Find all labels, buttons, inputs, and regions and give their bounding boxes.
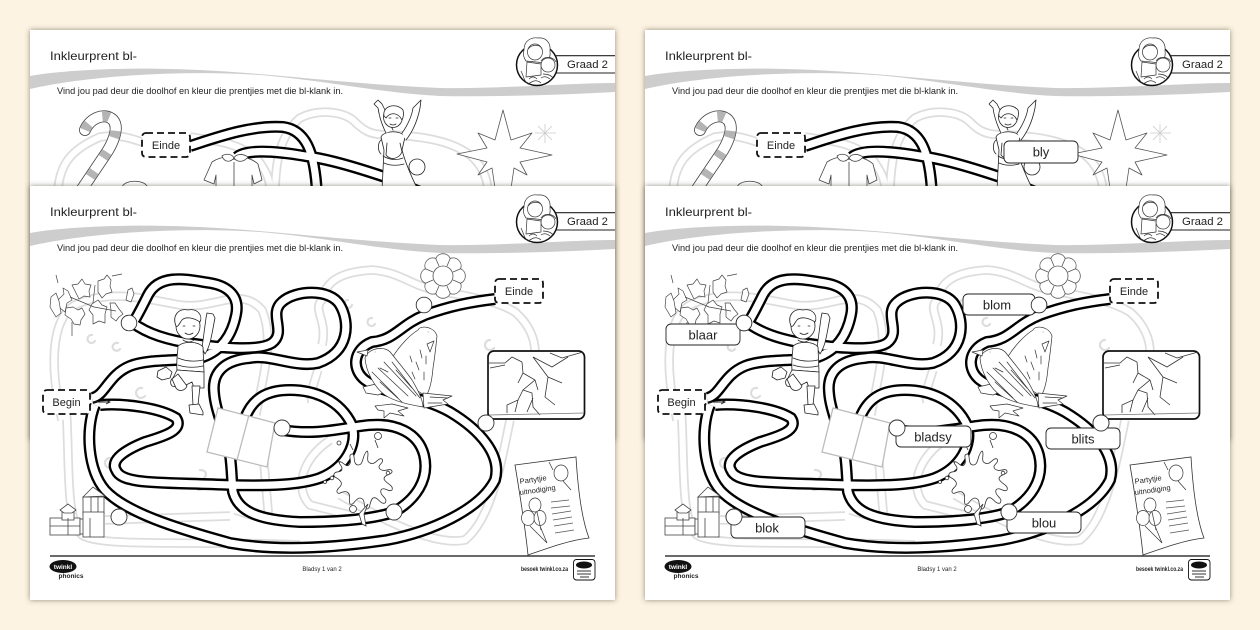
panel: back worksheet right (645, 30, 1230, 440)
invitation text line two left: uitnodiging (519, 483, 556, 497)
heading left: Inkleurprent bl- (50, 205, 137, 219)
twinkl logo text right: twinkl (669, 564, 687, 571)
maze with pictures right (658, 254, 1204, 555)
answer label bly: bly (1033, 144, 1050, 160)
end label back right: Einde (767, 140, 795, 152)
answer label blaar: blaar (689, 328, 718, 342)
instruction back right: Vind jou pad deur die doolhof en kleur die prentjies met die bl-klank in. (672, 86, 958, 96)
page number right: Bladsy 1 van 2 (917, 567, 957, 573)
answer label blok: blok (755, 520, 779, 536)
begin label left: Begin (52, 397, 81, 409)
answer label bly (1004, 141, 1078, 163)
page number left: Bladsy 1 van 2 (302, 567, 342, 573)
phonics logo text right: phonics (674, 573, 699, 580)
footer rule and logos left (50, 556, 595, 580)
website right: besoek twinkl.co.za (1136, 567, 1184, 573)
invitation text line two right: uitnodiging (1134, 483, 1171, 497)
panel: back worksheet left (30, 30, 615, 440)
begin label right: Begin (667, 397, 696, 409)
swoosh and grade badge left (30, 195, 615, 253)
path stop circles above labels (726, 297, 1109, 525)
answer label blom (963, 294, 1035, 315)
answer label blou: blou (1032, 516, 1056, 530)
twinkl logo text left: twinkl (54, 564, 72, 571)
grade right: Graad 2 (1182, 216, 1223, 228)
invitation text right: Partytjie (1134, 473, 1162, 486)
end label back left: Einde (152, 140, 180, 152)
invitation text left: Partytjie (519, 473, 547, 486)
instruction left: Vind jou pad deur die doolhof en kleur die prentjies met die bl-klank in. (57, 243, 343, 253)
panel: front worksheet right with answers (645, 186, 1230, 600)
answer label blok (731, 517, 805, 538)
instruction right: Vind jou pad deur die doolhof en kleur die prentjies met die bl-klank in. (672, 243, 958, 253)
website left: besoek twinkl.co.za (521, 567, 569, 573)
grade back left: Graad 2 (567, 59, 608, 71)
answer label blou (1007, 512, 1081, 533)
end label right: Einde (1120, 286, 1148, 298)
heading right: Inkleurprent bl- (665, 205, 752, 219)
instruction back left: Vind jou pad deur die doolhof en kleur die prentjies met die bl-klank in. (57, 86, 343, 96)
grade back right: Graad 2 (1182, 59, 1223, 71)
maze with pictures left (43, 254, 589, 555)
back maze and pictures right (673, 100, 1171, 198)
heading back right: Inkleurprent bl- (665, 49, 752, 63)
footer rule and logos right (664, 556, 1210, 580)
heading back left: Inkleurprent bl- (50, 49, 137, 63)
back maze and pictures left (58, 100, 556, 198)
end label left: Einde (505, 286, 533, 298)
answer label bladsy: bladsy (914, 430, 952, 444)
phonics logo text left: phonics (59, 573, 84, 580)
answer label blom: blom (983, 298, 1011, 312)
answer label blits: blits (1071, 432, 1095, 446)
swoosh and grade badge right (645, 195, 1230, 253)
answer label blaar (666, 324, 740, 345)
panel: front worksheet left (30, 186, 615, 600)
answer label bladsy (896, 426, 971, 447)
answer label blits (1046, 428, 1120, 449)
grade left: Graad 2 (567, 216, 608, 228)
